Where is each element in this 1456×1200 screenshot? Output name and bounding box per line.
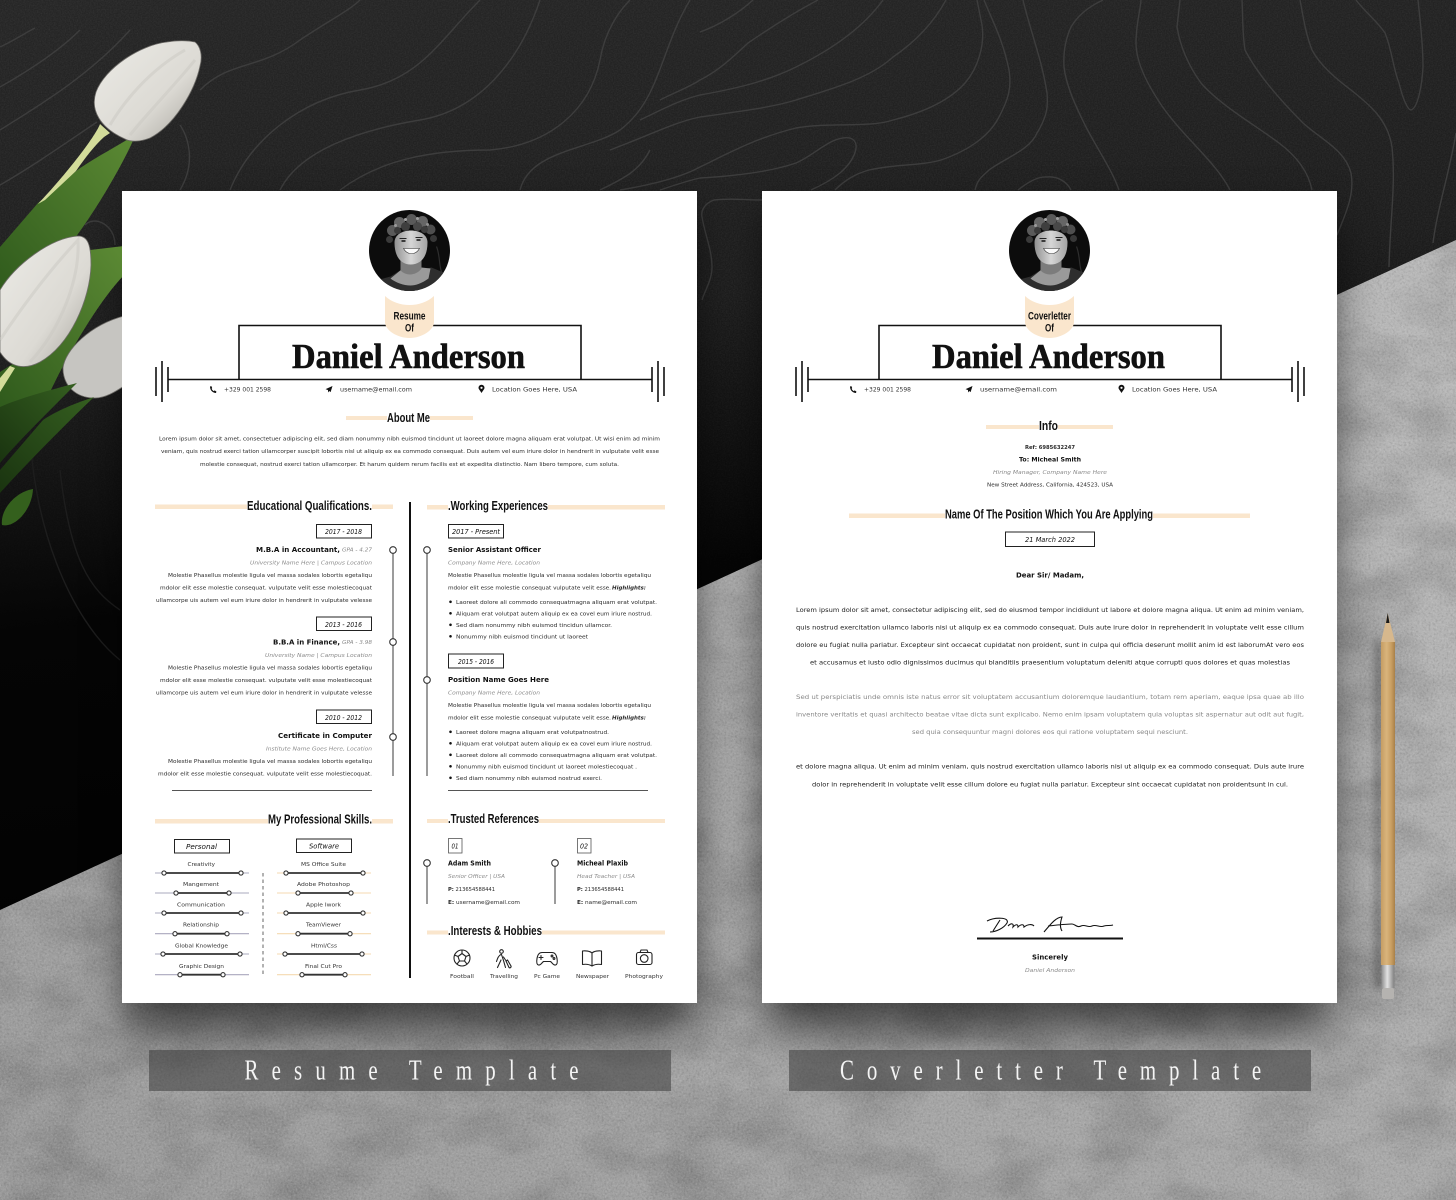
entry: BBA: 2013 - 2016 <box>325 621 362 629</box>
closed green bud <box>2 489 33 525</box>
software skills: Final Cut Pro <box>305 964 342 970</box>
contact row: username@email.com <box>980 388 1057 394</box>
section: info <box>986 419 1113 488</box>
entry: senior assistant officer: Laoreet dolore ali commodo consequatmagna aliquam erat volutpat. <box>456 600 657 606</box>
reference: Micheal Plaxib: 02 <box>580 842 588 850</box>
section: position heading <box>849 508 1250 546</box>
entry: position name: Laoreet dolore magna aliquam erat volutpatnostrud. <box>456 730 609 736</box>
pencil shadow <box>1375 640 1382 990</box>
personal skills: Graphic Design <box>179 964 224 970</box>
entry: BBA: GPA - 3.98 <box>342 640 373 646</box>
entry: BBA: University Name | Campus Location <box>265 653 372 659</box>
hobby labels: Pc Game <box>534 974 560 980</box>
entry: senior assistant officer: 2017 - Present <box>452 528 500 536</box>
sign-off <box>1025 954 1075 974</box>
ribbon text <box>394 310 426 334</box>
name: Daniel Anderson <box>292 337 525 376</box>
ribbon text: Coverletter <box>1028 310 1072 322</box>
entry: MBA: University Name Here | Campus Location <box>250 560 372 566</box>
leaf: lower front <box>0 397 94 493</box>
entry: certificate: Molestie Phasellus molestie ligula vel massa sodales lobortis egetaliqu <box>168 759 372 765</box>
caption: coverletter template <box>789 1050 1311 1091</box>
pencil tip <box>1381 613 1395 642</box>
letter paragraph one: et accusamus et iusto odio dignissimos ducimus qui blanditiis praesentium voluptatum deleniti atque corrupti quos dolores et quas molestias <box>810 660 1290 666</box>
entry: senior assistant officer: Nonummy nibh euismod tincidunt ut laoreet <box>456 634 588 640</box>
entry: MBA: Molestie Phasellus molestie ligula vel massa sodales lobortis egetaliqu <box>168 573 372 579</box>
entry: position name: Molestie Phasellus molestie ligula vel massa sodales lobortis egetaliqu <box>448 703 651 709</box>
letter paragraph one: quis nostrud exercitation ullamco laboris nisi ut aliquip ex ea commodo consequat. Duis aute irure dolor in reprehenderit in voluptate velit esse cillum <box>796 626 1304 632</box>
personal skills: Creativity <box>188 862 215 868</box>
tulip bud: middle <box>0 236 91 367</box>
ribbon text: Of <box>1045 322 1054 334</box>
contact row: +329 001 2598 <box>864 388 911 394</box>
section: educational qualifications: Educational Qualifications. <box>247 499 372 513</box>
section: trusted references: .Trusted References <box>448 812 539 826</box>
reference: Micheal Plaxib: Head Teacher | USA <box>577 874 635 880</box>
section: about me: Lorem ipsum dolor sit amet, consectetuer adipiscing elit, sed diam nonummy nibh euismod tincidunt ut laoreet dolore magna aliquam erat volutpat. Ut wisi enim ad minim <box>159 436 660 442</box>
leaf: rear <box>0 246 124 412</box>
caption: coverletter template: Coverletter Template <box>840 1054 1261 1086</box>
reference: Adam Smith: 01 <box>452 842 458 850</box>
contact row: Location Goes Here, USA <box>492 388 577 394</box>
section: educational qualifications <box>155 499 396 790</box>
letter paragraph three: dolor in reprehenderit in voluptate velit esse cillum dolore eu fugiat nulla pariatur. Excepteur sint occaecat cupidatat non proidentsunt in cul. <box>812 782 1288 788</box>
section: about me <box>159 411 660 468</box>
entry: MBA: 2017 - 2018 <box>325 528 362 536</box>
entry: MBA <box>156 524 373 604</box>
contact row: username@email.com <box>340 388 412 394</box>
name frame and rule <box>156 326 664 402</box>
entry: position name: Company Name Here, Location <box>448 690 540 696</box>
hobby labels: Photography <box>625 974 663 980</box>
software skills: Adobe Photoshop <box>297 882 350 888</box>
letter paragraph one: Lorem ipsum dolor sit amet, consectetur adipiscing elit, sed do eiusmod tempor incididunt ut labore et dolore magna aliqua. Ut enim ad minim veniam, <box>796 608 1304 614</box>
section: info: To: Micheal Smith <box>1019 456 1081 464</box>
background: topographic contour lines <box>0 0 1456 660</box>
reference: Adam Smith: P: 213654588441 <box>448 887 495 893</box>
entry: BBA: B.B.A in Finance, <box>273 638 340 646</box>
letter paragraph three: et dolore magna aliqua. Ut enim ad minim veniam, quis nostrud exercitation ullamco laboris nisi ut aliquip ex ea commodo consequat. Duis aute irure <box>796 764 1304 770</box>
reference: Adam Smith: E: username@email.com <box>448 900 520 906</box>
entry: senior assistant officer: Highlights: <box>612 586 646 592</box>
center divider <box>409 502 411 978</box>
leaf: lower <box>0 383 77 463</box>
entry: certificate: 2010 - 2012 <box>325 714 362 722</box>
panel: coverletter page <box>762 191 1337 1003</box>
background: dark grain <box>0 0 1456 426</box>
icon: traveller <box>496 950 511 968</box>
section: position heading: 21 March 2022 <box>1025 536 1075 544</box>
software skills: Apple Iwork <box>306 902 341 908</box>
pencil ferrule <box>1382 965 1394 988</box>
entry: senior assistant officer: Sed diam nonummy nibh euismod tincidun ullamcor. <box>456 623 612 629</box>
section: working experiences <box>424 499 665 790</box>
background: gray concrete surface <box>0 240 1456 1200</box>
section: working experiences: .Working Experiences <box>448 499 548 513</box>
entry: senior assistant officer: Molestie Phasellus molestie ligula vel massa sodales lobortis egetaliqu <box>448 573 651 579</box>
entry: BBA: Molestie Phasellus molestie ligula vel massa sodales lobortis egetaliqu <box>168 666 372 672</box>
ribbon text <box>1028 310 1072 334</box>
section: interests and hobbies <box>427 924 665 980</box>
entry: certificate: Institute Name Goes Here, Location <box>266 746 372 752</box>
background: concrete texture <box>0 240 1456 1200</box>
section: info: Hiring Manager, Company Name Here <box>993 470 1108 476</box>
software skills <box>277 839 371 977</box>
entry: position name: 2015 - 2016 <box>458 658 494 666</box>
reference: Adam Smith: Adam Smith <box>448 860 491 868</box>
software skills: TeamViewer <box>305 922 342 928</box>
entry: BBA: ullamcorpe uis autem vel eum iriure dolor in hendrerit in vulputate velesse <box>156 690 373 696</box>
icon: football <box>454 950 470 966</box>
letter paragraph one: dolore eu fugiat nulla pariatur. Excepteur sint occaecat cupidatat non proident, sunt in culpa qui officia deserunt mollit anim id est laborumAt vero eos <box>796 643 1304 649</box>
personal skills <box>155 840 249 977</box>
entry: senior assistant officer: Company Name Here, Location <box>448 560 540 566</box>
reference: Micheal Plaxib: E: name@email.com <box>577 900 637 906</box>
pencil <box>1375 613 1395 999</box>
reference: Micheal Plaxib: P: 213654588441 <box>577 887 624 893</box>
section: info: New Street Address, California, 424523, USA <box>987 482 1113 488</box>
section: interests and hobbies: .Interests & Hobbies <box>448 924 542 938</box>
section: trusted references <box>424 812 665 906</box>
section: info: Info <box>1039 419 1058 433</box>
section: professional skills <box>155 812 393 977</box>
entry: senior assistant officer <box>448 524 657 640</box>
entry: certificate <box>158 710 372 778</box>
caption: resume template: Resume Template <box>244 1054 579 1086</box>
entry: certificate: Certificate in Computer <box>278 731 372 740</box>
entry: certificate: mdolor elit esse molestie consequat. vulputate velit esse molestiecoquat. <box>158 772 372 778</box>
personal skills: Global Knowledge <box>175 944 228 950</box>
letter paragraph two: Sed ut perspiciatis unde omnis iste natus error sit voluptatem accusantium doloremque laudantium, totam rem aperiam, eaque ipsa quae ab illo <box>796 695 1305 701</box>
sign-off: Sincerely <box>1032 954 1069 962</box>
hobby labels <box>450 974 663 980</box>
section: about me: About Me <box>387 411 430 425</box>
letter paragraph one <box>796 608 1304 666</box>
panel: resume page <box>122 191 697 1003</box>
section: about me: veniam, quis nostrud exerci tation ullamcorper suscipit lobortis nisl ut aliquip ex ea commodo consequat. Duis autem vel eum iriure dolor in hendrerit in vulputate velit esse <box>161 449 660 455</box>
signature <box>977 917 1123 940</box>
ribbon text: Resume <box>394 310 426 322</box>
software skills: MS Office Suite <box>301 862 346 868</box>
tulips <box>0 41 201 525</box>
icon: camera <box>636 950 652 964</box>
personal skills: Relationship <box>183 922 219 928</box>
entry: BBA: mdolor elit esse molestie consequat. vulputate velit esse molestiecoquat <box>160 678 372 684</box>
contact row <box>210 385 577 394</box>
entry: position name <box>448 654 657 782</box>
section: info: Ref: 6985632247 <box>1025 445 1075 451</box>
entry: position name: Highlights: <box>612 716 646 722</box>
sign-off: Daniel Anderson <box>1025 968 1075 974</box>
entry: BBA <box>156 617 373 696</box>
shadow of resume and letter sheets <box>126 215 1333 1030</box>
hobby labels: Newspaper <box>576 974 610 980</box>
reference: Adam Smith: Senior Officer | USA <box>448 874 505 880</box>
ribbon badge <box>385 296 434 338</box>
icon: game controller <box>537 952 557 965</box>
software skills: Html/Css <box>311 944 337 950</box>
entry: position name: mdolor elit esse molestie consequat vulputate velit esse. <box>448 716 611 722</box>
leaf: upper <box>0 134 136 300</box>
name: Daniel Anderson <box>932 337 1165 376</box>
salutation: Dear Sir/ Madam, <box>1016 572 1084 580</box>
section: position heading: Name Of The Position Which You Are Applying <box>945 508 1153 522</box>
section: professional skills: My Professional Skills. <box>268 812 372 826</box>
timeline <box>390 547 396 776</box>
contact row: +329 001 2598 <box>224 388 271 394</box>
letter paragraph three <box>796 764 1304 788</box>
personal skills: Personal <box>186 843 217 851</box>
portrait photo <box>369 210 450 292</box>
pencil lead <box>1386 613 1390 623</box>
header <box>796 210 1304 402</box>
contact row: Location Goes Here, USA <box>1132 388 1217 394</box>
tulip bud: top <box>94 41 201 141</box>
portrait photo <box>1009 210 1090 292</box>
entry: position name: Position Name Goes Here <box>448 675 549 684</box>
entry: position name: Sed diam nonummy nibh euismod nostrud exerci. <box>456 776 602 782</box>
reference: Micheal Plaxib: Micheal Plaxib <box>577 860 628 868</box>
entry: MBA: GPA - 4.27 <box>342 548 373 554</box>
entry: senior assistant officer: mdolor elit esse molestie consequat vulputate velit esse. <box>448 586 611 592</box>
software skills: Software <box>309 842 339 850</box>
ribbon badge <box>1025 296 1074 338</box>
caption: resume template <box>149 1050 671 1091</box>
personal skills: Communication <box>177 902 225 908</box>
timeline <box>424 547 430 776</box>
tulip bud: rear <box>63 316 124 398</box>
entry: MBA: mdolor elit esse molestie consequat. vulputate velit esse molestiecoquat <box>160 586 372 592</box>
stem <box>0 124 110 392</box>
header <box>156 210 664 402</box>
pencil eraser <box>1382 988 1394 999</box>
entry: position name: Laoreet dolore ali commodo consequatmagna aliquam erat volutpat. <box>456 753 657 759</box>
entry: MBA: M.B.A in Accountant, <box>256 545 340 554</box>
entry: senior assistant officer: Aliquam erat volutpat autem aliquip ex ea covel eum iriure nostrud. <box>456 612 652 618</box>
section: about me: molestie consequat, nostrud exerci tation ullamcorper. Et harum quidem rerum facilis est et expedita distinctio. Nam libero tempore, cum soluta. <box>200 462 619 468</box>
ribbon text: Of <box>405 322 414 334</box>
entry: position name: Aliquam erat volutpat autem aliquip ex ea covel eum iriure nostrud. <box>456 742 652 748</box>
letter paragraph two: sed quia consequuntur magni dolores eos qui ratione voluptatem sequi nesciunt. <box>912 730 1188 736</box>
pencil barrel <box>1381 642 1395 965</box>
contact row <box>850 385 1217 394</box>
entry: senior assistant officer: Senior Assistant Officer <box>448 545 541 554</box>
entry: position name: Nonummy nibh euismod tincidunt ut laoreet molestiecoquat . <box>456 764 637 770</box>
personal skills: Mangement <box>183 882 219 888</box>
reference: Adam Smith <box>424 838 520 906</box>
entry: MBA: ullamcorpe uis autem vel eum iriure dolor in hendrerit in vulputate velesse <box>156 598 373 604</box>
letter paragraph two <box>796 695 1305 736</box>
icon: open book <box>582 951 602 966</box>
name frame and rule <box>796 326 1304 402</box>
hobby labels: Travelling <box>489 974 518 980</box>
reference: Micheal Plaxib <box>552 838 637 906</box>
hobby labels: Football <box>450 974 474 980</box>
letter paragraph two: inventore veritatis et quasi architecto beatae vitae dicta sunt explicabo. Nemo enim ipsam voluptatem quia voluptas sit aspernatur aut odit aut fugit, <box>796 712 1304 718</box>
